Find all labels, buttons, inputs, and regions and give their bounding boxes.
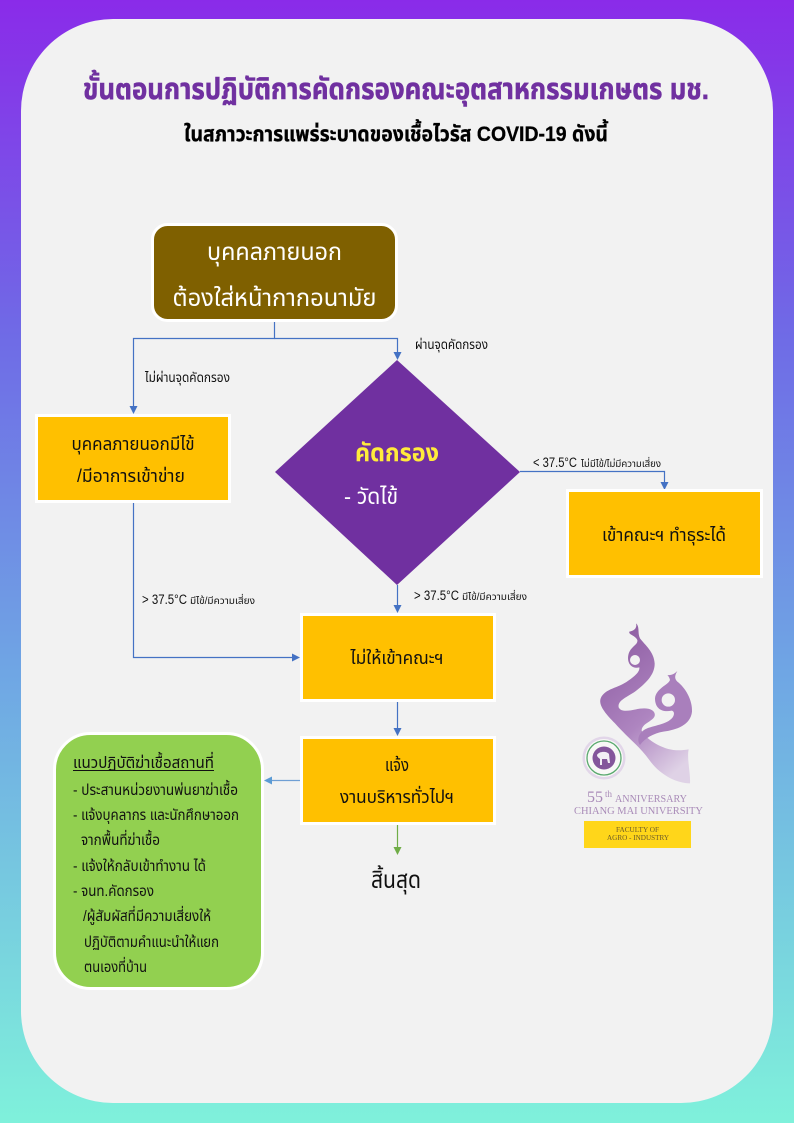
- label: above 37.5 left: > 37.5°C: [142, 592, 187, 607]
- panel: disinfection guidance: [54, 734, 262, 988]
- guidance list: - แจ้งให้กลับเข้าทำงาน ได้: [73, 858, 206, 875]
- decision diamond: screening: [275, 360, 520, 585]
- box: no entry: ไม่ให้เข้าคณะฯ: [350, 648, 444, 668]
- subtitle: ในสภาวะการแพร่ระบาดของเชื้อไวรัส COVID-19 ดังนี้: [184, 119, 609, 146]
- arrow: to end: [394, 825, 402, 855]
- faculty badge: AGRO - INDUSTRY: [607, 834, 669, 842]
- box: may enter: [568, 490, 762, 576]
- box: outsider with fever: [36, 416, 230, 502]
- anniversary text: [587, 789, 687, 806]
- logo: 55th anniversary naga: [574, 623, 703, 848]
- arrow: to disinfection guidance: [264, 776, 300, 784]
- box: notify general admin: แจ้ง: [385, 755, 409, 775]
- box: outsiders: [152, 224, 396, 320]
- label: failed checkpoint: ไม่ผ่านจุดคัดกรอง: [144, 370, 230, 385]
- box: may enter: เข้าคณะฯ ทำธุระได้: [602, 525, 726, 546]
- guidance list: - ประสานหน่วยงานพ่นยาฆ่าเชื้อ: [73, 779, 238, 799]
- label: above 37.5 right: > 37.5°C: [414, 588, 459, 603]
- guidance list: จากพื้นที่ฆ่าเชื้อ: [81, 829, 160, 849]
- box: outsider with fever: บุคคลภายนอกมีไข้: [72, 434, 194, 455]
- title: ขั้นตอนการปฏิบัติการคัดกรองคณะอุตสาหกรรมเกษตร มช.: [83, 69, 709, 106]
- box: outsiders: บุคคลภายนอก: [207, 239, 342, 267]
- label: above 37.5 right: [414, 588, 527, 603]
- anniversary text: ANNIVERSARY: [615, 794, 687, 805]
- end label: สิ้นสุด: [371, 864, 421, 895]
- label: above 37.5 right: มีไข้/มีความเสี่ยง: [462, 589, 527, 603]
- box: no entry: [302, 614, 494, 700]
- box: outsider with fever: /มีอาการเข้าข่าย: [77, 466, 185, 486]
- box: outsiders: ต้องใส่หน้ากากอนามัย: [172, 284, 376, 312]
- decision diamond: screening: คัดกรอง: [355, 439, 439, 467]
- guidance list: - จนท.คัดกรอง: [73, 883, 154, 900]
- anniversary text: 55: [587, 789, 603, 806]
- faculty badge: FACULTY OF: [616, 826, 659, 834]
- naga emblem: [600, 623, 692, 783]
- anniversary text: th: [605, 789, 612, 799]
- guidance list: - แจ้งบุคลากร และนักศึกษาออก: [73, 807, 239, 824]
- university name: CHIANG MAI UNIVERSITY: [574, 805, 703, 817]
- box: notify general admin: งานบริหารทั่วไปฯ: [340, 785, 454, 807]
- label: above 37.5 left: [142, 592, 255, 607]
- guidance list: ตนเองที่บ้าน: [84, 956, 147, 976]
- decision diamond: screening: - วัดไข้: [344, 484, 398, 509]
- guidance heading: แนวปฏิบัติฆ่าเชื้อสถานที่: [73, 751, 214, 772]
- guidance list: [73, 779, 239, 976]
- label: passed checkpoint: ผ่านจุดคัดกรอง: [415, 337, 488, 352]
- label: below 37.5: < 37.5°C: [533, 455, 577, 470]
- label: above 37.5 left: มีไข้/มีความเสี่ยง: [190, 593, 255, 607]
- label: below 37.5: ไม่มีไข้/ไม่มีความเสี่ยง: [580, 456, 661, 470]
- guidance list: ปฏิบัติตามคำแนะนำให้แยก: [84, 934, 219, 951]
- guidance list: /ผู้สัมผัสที่มีความเสี่ยงให้: [83, 905, 211, 925]
- label: below 37.5: [533, 455, 661, 470]
- university seal: [582, 736, 626, 780]
- arrowheads: [130, 352, 668, 736]
- connectors: [134, 322, 664, 728]
- faculty badge: [584, 821, 691, 848]
- box: notify general admin: [302, 738, 494, 824]
